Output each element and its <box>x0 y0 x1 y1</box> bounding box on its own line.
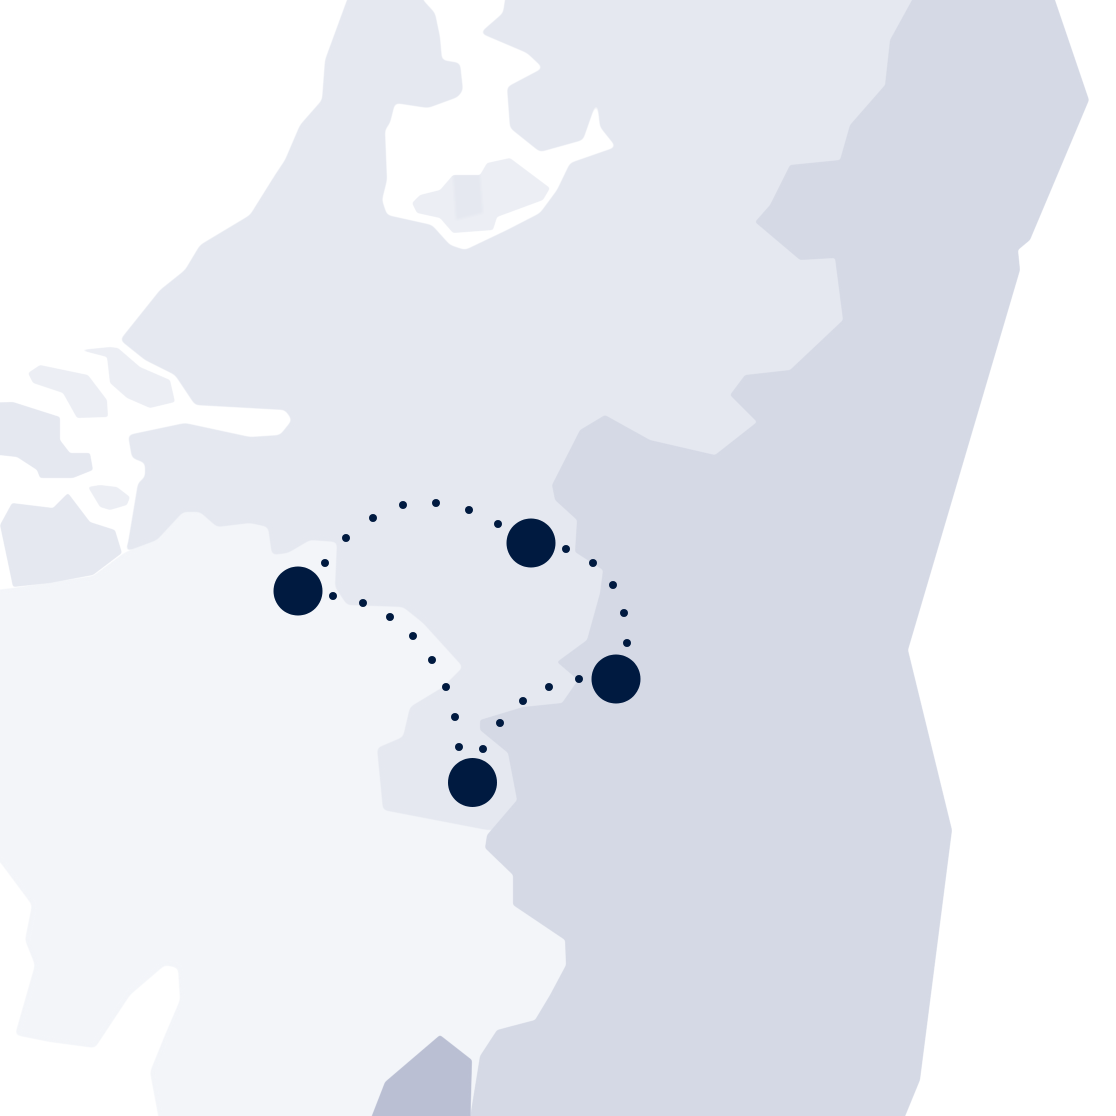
land: central light region <box>120 0 920 832</box>
route: small dots <box>321 499 631 753</box>
route: south stop marker <box>448 758 497 807</box>
route: west stop marker <box>274 566 322 616</box>
land: southern lightest region <box>0 500 600 1116</box>
inland lake <box>382 0 616 250</box>
route: east stop marker <box>592 654 640 704</box>
land: southern darkest region <box>364 1035 472 1116</box>
delta islands <box>0 347 175 587</box>
route: north stop marker <box>506 518 556 568</box>
lake island <box>412 158 550 233</box>
land: eastern darker region <box>467 0 1089 1116</box>
